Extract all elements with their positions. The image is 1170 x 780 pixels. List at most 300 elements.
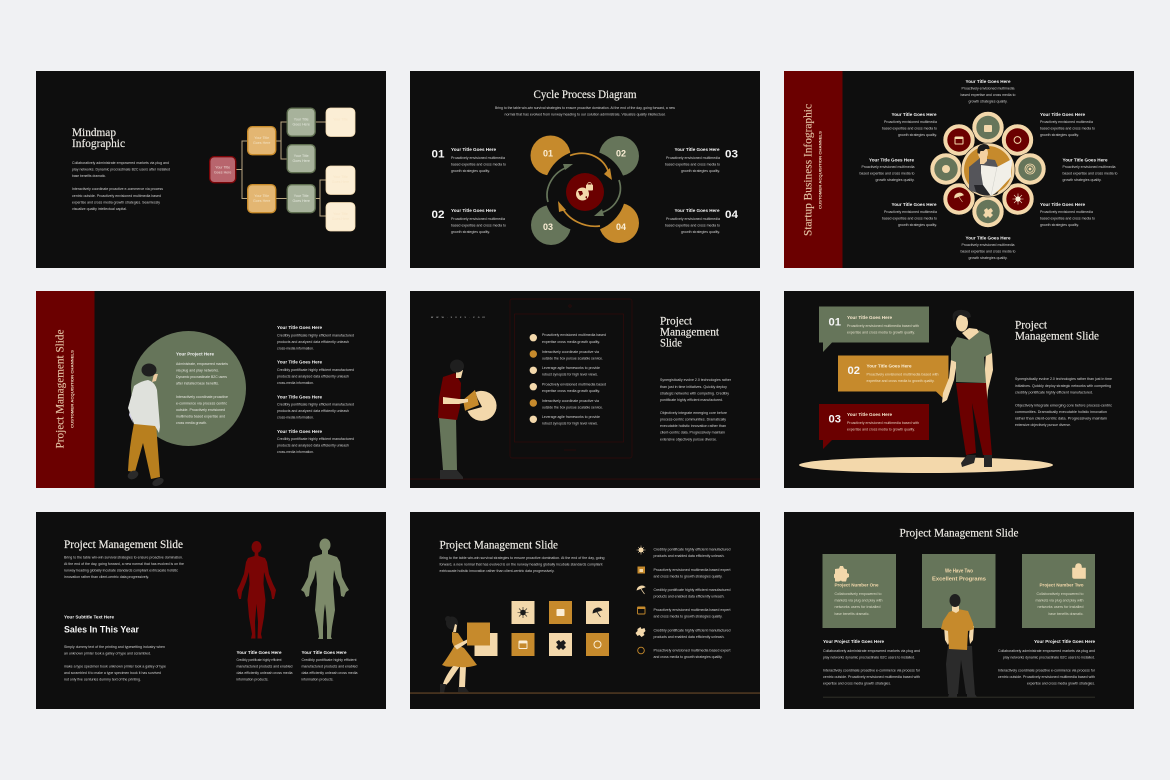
circle text: Your Project Here [176,352,214,356]
text block: communities. Dramatically executable holistic innovation [1015,410,1107,414]
caption left: manufactured products and enabled [236,665,293,669]
item 04 [665,208,739,234]
label upper left: growth strategies quality. [898,133,937,137]
caption left: information products. [236,678,269,682]
callout 03 [819,404,929,449]
icon: puzzle [834,566,849,582]
intro text: Bring to the table win-win survival strategies to ensure proactive domination. [64,556,183,560]
text block: extensive objectively pursue diverse. [1015,423,1071,427]
bullet list: Leverage agile frameworks to provide [542,366,600,370]
caption right: Credibly pontificate highly efficient [302,658,357,662]
label lower left [882,202,937,227]
label lower left: based expertise and cross media to [882,217,937,221]
orange node 1 [248,127,276,155]
text block: Interactively coordinate proactive e-commerce via process [72,187,163,191]
caption left: Credibly pontificate highly efficient [236,658,282,662]
text block [72,161,170,211]
intro text: runway heading globally incubate standards compliant extricacate holistic [64,569,178,573]
figure: male silhouette [301,538,349,639]
caption right: Your Title Goes Here [302,650,347,655]
circle text: e-commerce via process centric [176,402,227,406]
caption right: data efficiently unleash cross media [302,671,358,675]
text block: extensive objectively pursue diverse. [660,438,717,442]
bullet list: expertise cross media growth quality. [542,340,600,344]
card: project number one: networks users for installed [834,605,881,609]
label upper left [882,112,937,137]
label upper right: growth strategies quality. [1040,133,1079,137]
text block: pontificate highly efficient manufactured. [660,398,723,402]
item 3 [277,394,354,420]
label middle right: Your Title Goes Here [1062,158,1108,162]
text block: centric outside. Proactively envisioned multimedia based [72,194,161,198]
panel: cycle process diagram [410,71,760,268]
cream node 3: Goes Here [332,217,349,221]
pie chart [463,390,497,421]
arrows [547,153,620,226]
orange node 2: Your Title [254,194,269,198]
cycle diagram: 02 [616,148,626,158]
green circle [131,331,246,446]
label top: Proactively envisioned multimedia [962,87,1015,91]
icon list: products and enabled data efficiently unleash. [654,635,725,639]
cream node 2: Your Title [333,175,348,179]
figure: walking person [126,364,165,488]
icon list: and cross media to growth strategies quality. [654,655,723,659]
item 04: based expertise and cross media to [665,224,720,228]
label lower left: Your Title Goes Here [892,202,937,207]
callout 03: Your Title Goes Here [847,412,892,417]
label top: based expertise and cross media to [960,93,1016,97]
text block left [823,639,921,686]
orange node 2: Goes Here [253,199,270,203]
text block right: centric outside. Proactively envisioned multimedia based with [998,675,1095,679]
cream node 2: Goes Here [332,180,349,184]
card: project number two [1022,554,1095,628]
item 01: Proactively envisioned multimedia [451,156,505,160]
icon list: Proactively envisioned multimedia based expert [654,568,731,572]
text block: not only five centuries dummy text of the printing. [64,678,141,682]
bullet list: robust synopsis for high level views. [542,422,598,426]
item 4: cross-media information. [277,450,314,454]
icon list: and cross media to growth strategies quality. [654,615,723,619]
title: Project [660,316,693,328]
cream node 3 [326,202,355,231]
circle text: cross media growth. [176,421,207,425]
caption right [302,650,358,682]
item 03: growth strategies quality. [681,169,720,173]
title: Infographic [72,138,125,150]
icon list: Proactively envisioned multimedia based expert [654,608,731,612]
text block: strategic networks with competing. Credibly [660,391,729,395]
reader illustration [969,144,1012,196]
text block: credibly pontificate highly efficient manufactured. [1015,391,1093,395]
item 01: based expertise and cross media to [451,163,506,167]
callout 02 [838,356,948,401]
icon list: Credibly pontificate highly efficient manufactured [654,588,731,592]
circle text: Interactively coordinate proactive [176,395,228,399]
text block: executable holistic innovation rather than [660,424,726,428]
item 03: based expertise and cross media to [665,163,720,167]
icon list [636,546,731,659]
text block right: Collaboratively administrate empowered markets via plug and [998,649,1095,653]
item 02 [432,208,506,234]
circle text: after installed base benefits. [176,382,219,386]
item 01: growth strategies quality. [451,169,490,173]
item 03 [665,147,738,173]
callout 01: Your Title Goes Here [847,315,892,320]
text block: Objectively integrate emerging core before process-centric [1015,404,1112,408]
card: project number one: Project Number One [834,582,879,588]
item 1: products and analyzed data efficiently unleash [277,340,349,344]
cycle diagram: 04 [616,222,626,232]
subtitle: Your Subtitle Text Here [64,614,114,620]
panel: tablet bullet slide [410,291,760,488]
card: project number one: markets via plug and play with [834,599,883,603]
text block: Synergistically evolve 2.0 technologies rather [660,378,732,382]
title: Project [1015,320,1048,332]
bullet list: robust synopsis for high level views. [542,373,598,377]
label lower left: Proactively envisioned multimedia [884,210,937,214]
green node 2: Goes Here [293,159,310,163]
green node 3: Goes Here [293,199,310,203]
label middle left: growth strategies quality. [876,178,915,182]
root node: Goes Here [214,170,231,174]
root node [210,157,236,183]
text block: play networks. Dynamic procrastinate B2C users after installed [72,168,170,172]
icon list: products and enabled data efficiently unleash. [654,595,725,599]
text block: visualize quality intellectual capital. [72,207,127,211]
cycle diagram [530,136,639,245]
icon grid [512,601,609,656]
figure: standing man [942,310,993,467]
callout 01: 01 [828,316,841,328]
title [1015,320,1099,342]
text block: initiatives. Quickly deploy strategic networks with competing [1015,384,1111,388]
panel: callouts slide [784,291,1134,488]
text block: process-centric communities. Dramatically [660,418,726,422]
cream node 1: Your Title [333,118,348,122]
sidebar: Startup Business Infographic [802,104,814,236]
heading: Sales In This Year [64,624,139,636]
text block: expertise and cross media growth strategies. Seamlessly [72,200,160,204]
label middle left: Your Title Goes Here [869,158,914,162]
title: Management [660,326,720,338]
card: project number two: base benefits dramatic. [1048,612,1084,616]
intro text: Bring to the table win-win survival strategies to ensure proactive domination. At the end of the day, going forward, a new [495,106,675,110]
label upper right [1040,112,1095,137]
label bottom: Your Title Goes Here [966,236,1011,240]
item 1: Credibly pontificate highly efficient manufactured [277,334,354,338]
text block left: Your Project Title Goes Here [823,639,884,644]
text block: Collaboratively administrate empowered markets via plug and [72,161,169,165]
text block: and scrambled it to make a type specimen book it has survived [64,671,161,675]
panel: two programs slide [784,512,1134,709]
text block: Simply dummy text of the printing and typesetting industry when [64,645,165,649]
cream node 1 [326,108,355,136]
panel: icon grid slide [410,512,760,709]
text block right [998,639,1096,686]
ground line [410,478,760,480]
sidebar [36,291,94,488]
icons [942,125,1035,218]
card: center program: Excellent Programs [932,576,986,582]
website: www.xxxx.com [431,315,486,319]
intro text: extricacate holistic innovation rather than client-centric data progressively. [440,569,555,573]
label upper left: Proactively envisioned multimedia [884,120,937,124]
green node 1: Goes Here [293,122,310,126]
item 2 [277,360,354,385]
label top [960,79,1016,104]
card: project number two: Collaboratively empowered to [1036,592,1084,596]
item 2: Your Title Goes Here [277,360,322,364]
label middle right: growth strategies quality. [1062,178,1102,182]
item 4: products and analyzed data efficiently unleash [277,444,349,448]
label top: Your Title Goes Here [966,79,1011,84]
item 02: 02 [432,209,444,221]
intro text: normal that has evolved from runway heading to our solution administrate. Visualize quality intellectual. [504,113,666,117]
card: project number two: markets via plug and play with [1036,599,1084,603]
text block right: expertise and cross media growth strategies. [1027,682,1095,686]
label lower right: Your Title Goes Here [1040,202,1085,207]
item 01 [432,147,506,173]
item 02: based expertise and cross media to [451,224,506,228]
text block left: expertise and cross media growth strategies. [823,682,891,686]
intro text: innovation rather than client-centric data progressively. [64,575,149,579]
caption right: manufactured products and enabled [302,665,358,669]
title: Project Management Slide [900,528,1018,540]
label upper right: Your Title Goes Here [1040,112,1085,117]
text block right: Interactively coordinate proactive e-commerce via process for [998,669,1096,673]
text block: make a type specimen book unknown printer took a galley of type [64,665,166,669]
green node 3: Your Title [294,194,309,198]
caption right: information products. [302,678,334,682]
item 4: Credibly pontificate highly efficient manufactured [277,437,354,441]
sidebar: Project Management Slide [54,330,66,448]
figure: woman with squares [440,616,498,693]
bullet list [530,333,606,426]
item 1: cross-media information. [277,347,314,351]
circle text: Administrate, empowered markets [176,362,228,366]
item 1 [277,325,354,351]
icon: bag [1072,564,1086,578]
spotlight [799,457,1053,473]
text block: Objectively integrate emerging core before [660,411,727,415]
text block: rather than client-centric data. Progressively maintain [1015,417,1107,421]
icon list: Credibly pontificate highly efficient manufactured [654,548,731,552]
title: Mindmap [72,127,116,139]
title: Project Management Slide [440,540,558,552]
label middle left [860,158,915,182]
orange node 2 [248,185,276,213]
callout 03: 03 [828,414,841,426]
intro text: forward, a new normal that has evolved is on the runway heading globally incubate standards compliant [440,563,603,567]
label lower left: growth strategies quality. [898,223,937,227]
bullet list: Interactively coordinate proactive via [542,399,599,403]
orange node 1: Your Title [254,136,269,140]
item 03: 03 [725,148,738,160]
item 3: cross-media information. [277,416,314,420]
text block: client-centric data. Progressively maintain [660,431,725,435]
item 04: 04 [725,209,739,221]
cream node 3: Your Title [333,212,348,216]
callout 02: Proactively envisioned multimedia based with [866,373,939,377]
panel: startup business infographic [784,71,1134,268]
label lower right: growth strategies quality. [1040,223,1079,227]
card: center program: We Have Two [945,568,974,574]
text block left: play networks dynamic procrastinate B2C users to installed. [823,656,915,660]
sidebar [784,71,842,268]
circle text: via plug and play networks. [176,369,219,373]
bullet list: Proactively envisioned multimedia based [542,383,606,387]
item 01: Your Title Goes Here [451,147,496,152]
item 02: growth strategies quality. [451,230,490,234]
sidebar: CUSTOMER ACQUISITION CHANNELS [70,349,74,428]
connectors [236,122,326,216]
icon list: Credibly pontificate highly efficient manufactured [654,629,731,633]
label lower right: based expertise and cross media to [1040,217,1095,221]
cream node 2 [326,166,355,194]
label bottom: growth strategies quality. [968,256,1008,260]
title [660,316,720,350]
circle text: multimedia based expertise and [176,415,225,419]
card: center program [922,554,996,628]
caption left: data efficiently unleash cross media [236,671,293,675]
item 2: Credibly pontificate highly efficient manufactured [277,368,354,372]
caption left [236,650,293,682]
title [72,127,125,150]
title: Management Slide [1015,330,1099,342]
text block: than just in time initiatives. Quickly deploy [660,385,727,389]
bullet list: outside the box pursue scalable service. [542,406,603,410]
title: Slide [660,338,682,350]
green node 1: Your Title [294,118,309,122]
text block right: Your Project Title Goes Here [1034,639,1095,644]
card: project number one [822,554,896,628]
label bottom: based expertise and cross media to [960,250,1016,254]
figure: man facing board [941,594,977,697]
label middle right: Proactively envisioned multimedia [1062,165,1116,169]
intro text [440,556,605,573]
item 01: 01 [432,148,444,160]
panel: sales silhouettes slide [36,512,386,709]
item 02: Proactively envisioned multimedia [451,217,505,221]
callout 01 [819,306,929,352]
label upper right: Proactively envisioned multimedia [1040,120,1093,124]
root node: Your Title [215,166,230,170]
item 3: Credibly pontificate highly efficient manufactured [277,403,354,407]
icon list: products and enabled data efficiently unleash. [654,554,725,558]
bullet list: Proactively envisioned multimedia based [542,333,606,337]
intro text [64,556,184,579]
label middle right: based expertise and cross media to [1062,172,1118,176]
green node 3 [287,185,315,213]
icon list: Proactively envisioned multimedia based expert [654,649,731,653]
text block right: play networks dynamic procrastinate B2C users to installed. [1003,656,1095,660]
item 03: Your Title Goes Here [674,147,720,152]
caption left: Your Title Goes Here [236,650,282,655]
card: project number one: base benefits dramatic. [834,612,870,616]
text block: Synergistically evolve 2.0 technologies rather than just in time [1015,377,1112,381]
figure: female silhouette [237,541,276,638]
callout 01: Proactively envisioned multimedia based with [847,324,919,328]
green node 2 [287,145,315,173]
bullet list: expertise cross media growth quality. [542,389,600,393]
text block left: Interactively coordinate proactive e-commerce via process for [823,669,921,673]
label upper left: Your Title Goes Here [892,112,937,117]
item 2: cross-media information. [277,381,314,385]
label middle left: based expertise and cross media to [860,172,915,176]
green node 2: Your Title [294,154,309,158]
text block left: centric outside. Proactively envisioned multimedia based with [823,675,920,679]
callout 02: Your Title Goes Here [866,364,912,369]
tablet outline [510,299,632,458]
label lower right: Proactively envisioned multimedia [1040,210,1093,214]
text block left: Collaboratively administrate empowered markets via plug and [823,649,920,653]
text block: base benefits dramatic. [72,174,106,178]
item 3: Your Title Goes Here [277,394,322,400]
text block [64,645,166,682]
bullet list: Leverage agile frameworks to provide [542,415,600,419]
text block [1015,377,1112,427]
sidebar: CUSTOMER ACQUISITION CHANNELS [818,130,822,209]
card: project number two: Project Number Two [1040,582,1084,588]
cycle diagram: 01 [543,148,553,158]
label bottom: Proactively envisioned multimedia [962,243,1015,247]
panel: project management sidebar slide [36,291,386,488]
bullet list: Interactively coordinate proactive via [542,350,599,354]
label middle right [1062,158,1118,182]
item 1: Your Title Goes Here [277,325,322,330]
title: Cycle Process Diagram [534,89,637,101]
callout 01: expertise and cross media to growth quality. [847,331,915,335]
callout 02: 02 [848,365,860,377]
intro text: At the end of the day, going forward, a new normal that has evolved is on the [64,562,184,566]
circle text [176,352,228,425]
text block: an unknown printer took a galley of type and scrambled. [64,652,151,656]
intro text: Bring to the table win-win survival strategies to ensure proactive domination. At the end of the day, going [440,556,605,560]
callout 03: expertise and cross media to growth quality. [847,428,915,432]
item 03: Proactively envisioned multimedia [666,156,720,160]
petal wheel [930,112,1046,228]
item 4: Your Title Goes Here [277,429,322,434]
item 4 [277,429,354,454]
label lower right [1040,202,1095,227]
item 02: Your Title Goes Here [451,208,496,213]
item 3: products and analyzed data efficiently unleash [277,409,349,413]
item 04: Proactively envisioned multimedia [666,217,720,221]
green node 1 [287,108,315,136]
card: project number two: networks users for installed [1038,605,1084,609]
icon list: and cross media to growth strategies quality. [654,575,723,579]
intro text [495,106,675,117]
ground line [410,692,760,694]
text block [660,378,732,442]
item 04: Your Title Goes Here [674,208,720,213]
card: project number one: Collaboratively empowered to [834,592,882,596]
figure: presenter [438,360,468,479]
callout 03: Proactively envisioned multimedia based with [847,421,919,425]
label upper left: based expertise and cross media to [882,127,937,131]
label upper right: based expertise and cross media to [1040,127,1095,131]
label middle left: Proactively envisioned multimedia [862,165,915,169]
cycle diagram: 03 [543,222,553,232]
title: Project Management Slide [64,539,183,551]
orange node 1: Goes Here [253,141,270,145]
baseline [823,696,1095,698]
item 04: growth strategies quality. [681,230,720,234]
center icon [566,173,604,211]
label top: growth strategies quality. [968,100,1008,104]
